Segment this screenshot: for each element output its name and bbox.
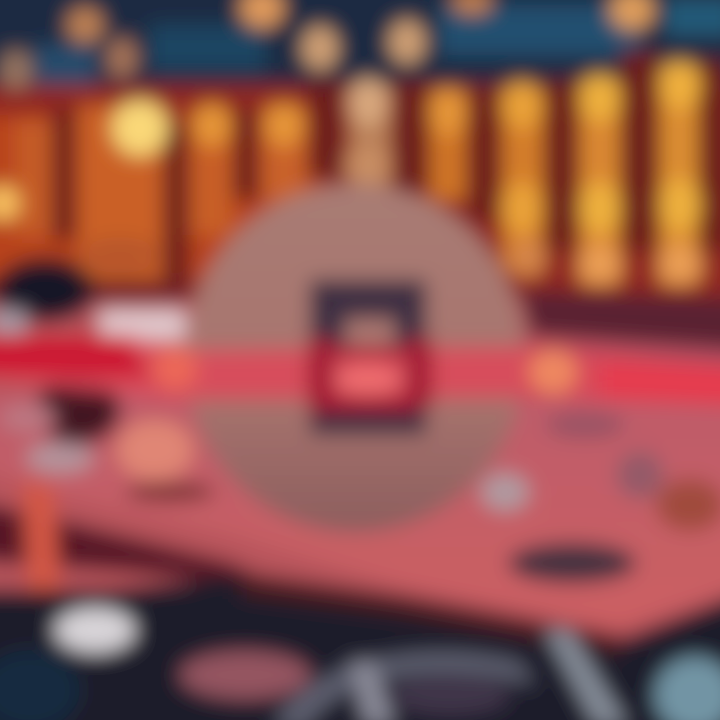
left dark cluster and white patch (0, 258, 185, 473)
coin disc (185, 184, 525, 532)
top dark blue band (0, 0, 720, 85)
warm light spots (0, 0, 702, 285)
panel: pink table surface (0, 340, 720, 628)
lower left red and dark shapes (0, 480, 290, 628)
coin (185, 184, 525, 532)
panel: red and orange lit building wall (0, 65, 720, 300)
dark columns (52, 50, 720, 290)
bottom dark navy foreground (0, 572, 720, 720)
table details (117, 411, 720, 531)
coin symbol (310, 280, 426, 434)
red horizontal light streak (0, 335, 720, 407)
dark strip under wall (0, 280, 720, 350)
coin letter over streak (308, 338, 432, 412)
oval table button (508, 543, 636, 583)
